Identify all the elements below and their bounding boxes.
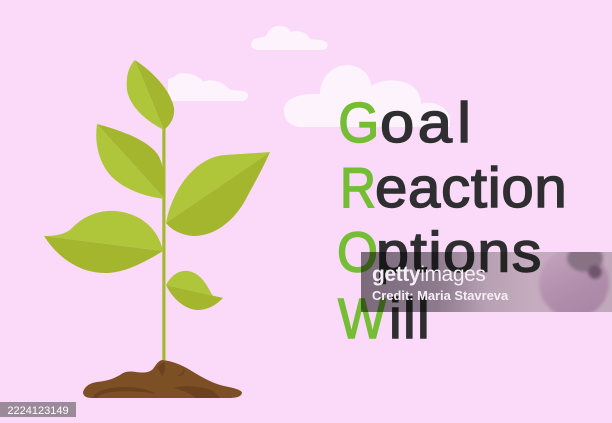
cloud: top — [251, 26, 328, 50]
line: Reaction: eaction — [375, 157, 567, 220]
line: Will: ill — [389, 287, 430, 351]
heading text: GROW acronym — [337, 90, 567, 351]
image id label — [0, 402, 76, 417]
watermark credit: Credit: Maria Stavreva — [372, 288, 509, 303]
watermark panel — [361, 252, 612, 312]
line: Goal — [338, 90, 471, 155]
line: Will: W — [338, 287, 386, 351]
line: Reaction: R — [340, 156, 376, 220]
watermark tinted layer — [361, 252, 612, 312]
soil shading — [93, 362, 220, 398]
image id label: 2224123149 — [7, 405, 69, 417]
leaf: left — [44, 211, 163, 273]
leaf: upper left — [96, 124, 165, 199]
leaf: small — [166, 271, 223, 310]
watermark logo: gettyimages — [372, 263, 485, 286]
cloud: left — [168, 73, 248, 101]
line: Options: O — [337, 220, 378, 284]
line: Will — [338, 287, 430, 351]
line: Options: ptions — [376, 221, 543, 284]
cloud: large — [284, 65, 450, 127]
leaf: top — [127, 60, 174, 130]
stem — [162, 128, 166, 364]
line: Goal: oal — [380, 90, 471, 154]
leaf: right — [166, 152, 270, 236]
soil mound — [83, 360, 242, 398]
plant — [44, 60, 270, 364]
line: Goal: G — [338, 91, 379, 155]
